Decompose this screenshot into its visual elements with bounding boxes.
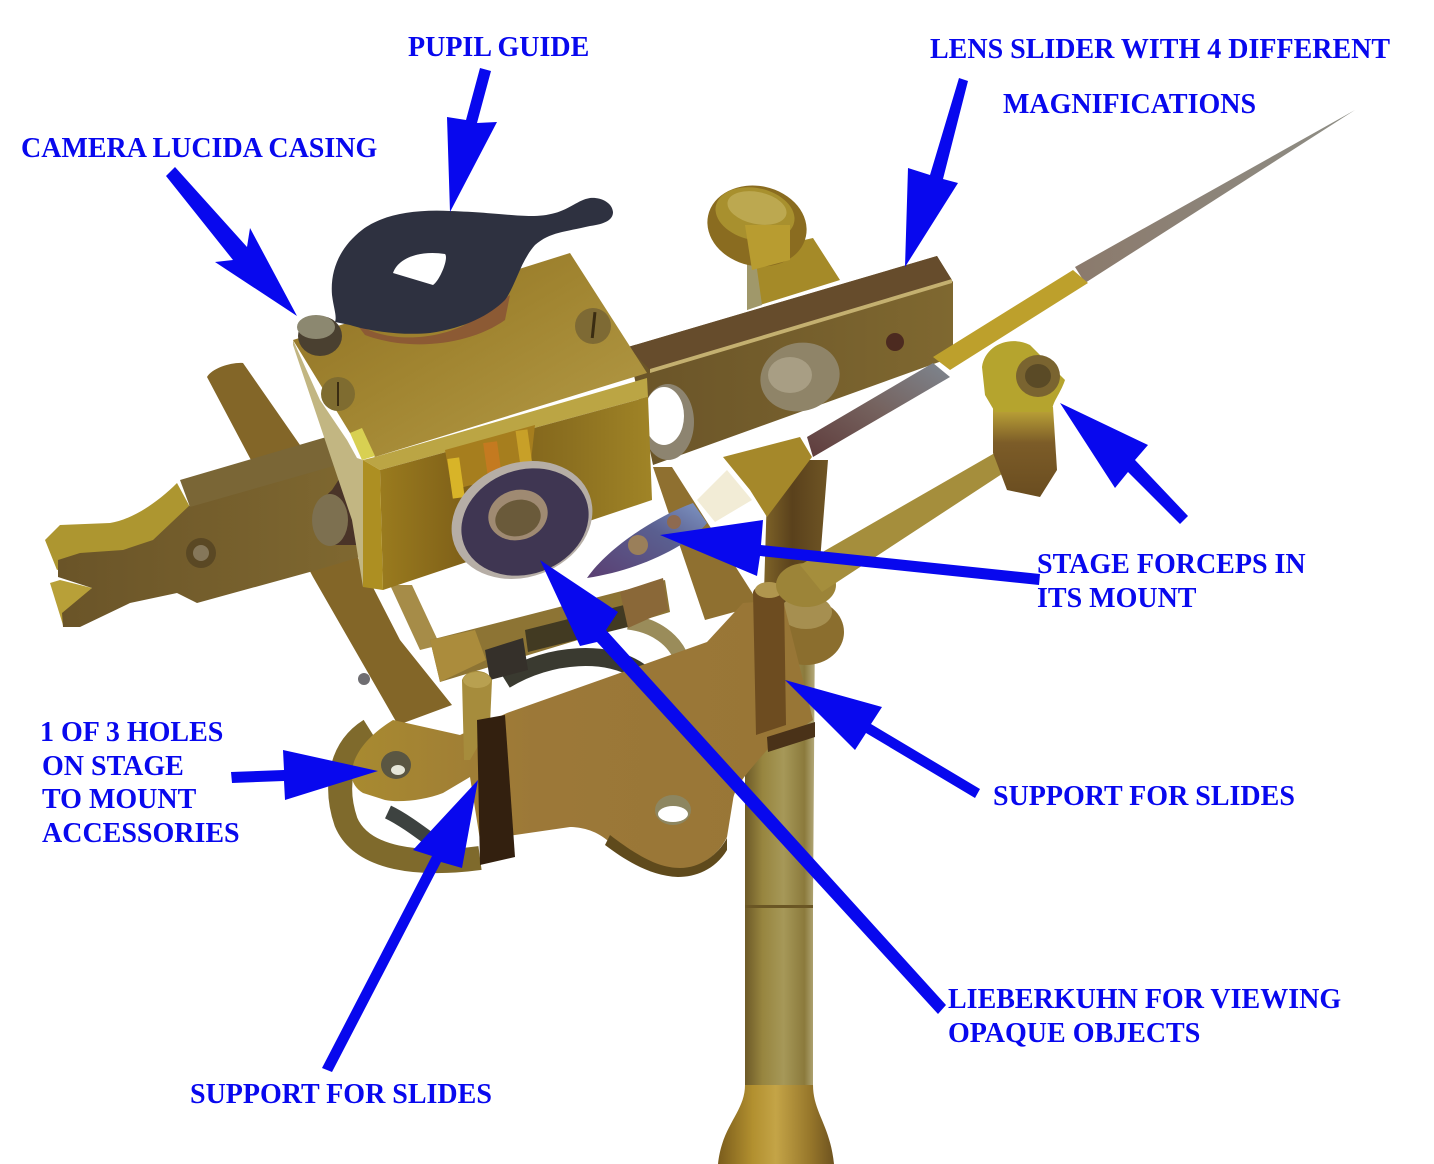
label: lens slider (930, 34, 1390, 120)
label: stage holes: 1 OF 3 HOLES (40, 717, 223, 748)
arrow: left slide support (322, 780, 478, 1072)
label: stage forceps: STAGE FORCEPS IN (1037, 549, 1306, 580)
arrow: lens slider (905, 78, 968, 267)
label: stage holes: ACCESSORIES (42, 818, 240, 849)
label: stage holes: ON STAGE (42, 751, 184, 782)
label: right slide support: SUPPORT FOR SLIDES (993, 781, 1295, 812)
label: Lieberkuhn: OPAQUE OBJECTS (948, 1018, 1200, 1049)
label: lens slider: LENS SLIDER WITH 4 DIFFERENT (930, 34, 1390, 65)
lens slider bar (628, 256, 953, 465)
label: camera lucida casing: CAMERA LUCIDA CASING (21, 133, 377, 164)
left slider fork end (45, 433, 360, 627)
label: stage forceps: ITS MOUNT (1037, 583, 1197, 614)
camera lucida casing (293, 253, 652, 590)
ring under stage (340, 622, 682, 861)
label: stage forceps (1037, 549, 1306, 614)
struts from casing to stage (207, 363, 760, 725)
label: Lieberkuhn (948, 984, 1341, 1049)
pupil guide disc (297, 198, 613, 356)
stage forceps with needle (587, 110, 1355, 578)
slide support posts (462, 582, 815, 865)
Lieberkuhn lens disc (435, 442, 609, 598)
label: lens slider: MAGNIFICATIONS (1003, 89, 1256, 120)
right collar behind stage (768, 595, 844, 665)
forceps mount arm (776, 341, 1065, 607)
label: stage holes: TO MOUNT (42, 784, 197, 815)
label: pupil guide: PUPIL GUIDE (408, 32, 589, 63)
cross tube behind stage (358, 578, 670, 685)
arrow: forceps (660, 520, 1040, 585)
label: Lieberkuhn: LIEBERKUHN FOR VIEWING (948, 984, 1341, 1015)
arrow: Lieberkuhn (540, 560, 946, 1014)
arrow: pupil guide (447, 68, 497, 212)
brass pillar (718, 460, 834, 1164)
focus knob and upper post (700, 176, 840, 310)
label: stage holes (40, 717, 240, 849)
arrow: camera lucida casing (166, 167, 297, 316)
arrow: stage hole (231, 750, 378, 800)
arrow: right slide support (785, 680, 980, 798)
arrow: forceps mount (1060, 403, 1188, 524)
stage plate (352, 600, 813, 877)
label: left slide support: SUPPORT FOR SLIDES (190, 1079, 492, 1110)
